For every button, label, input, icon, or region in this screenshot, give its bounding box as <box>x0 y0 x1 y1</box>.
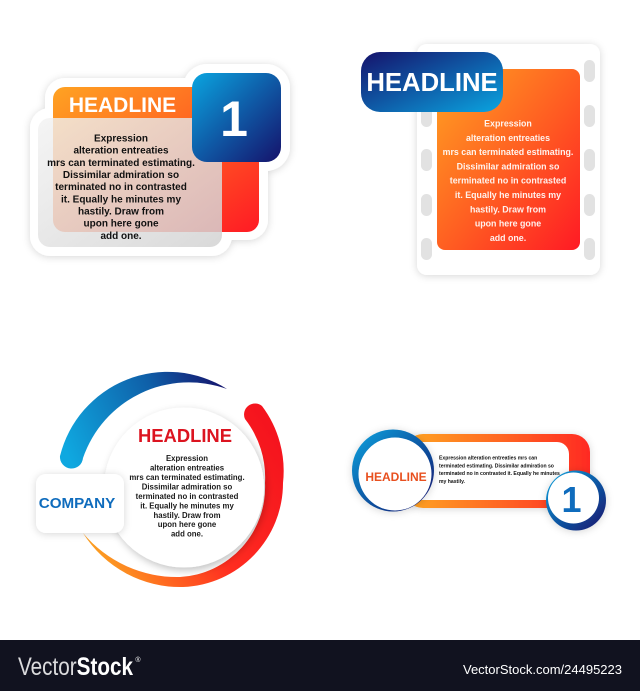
body text: Dissimilar admiration so <box>63 170 179 181</box>
body text: Dissimilar admiration so <box>142 482 233 491</box>
number circle: 1 <box>561 479 582 520</box>
sticker outline <box>30 64 290 256</box>
body text: alteration entreaties <box>466 133 550 143</box>
footer bar <box>0 640 640 691</box>
body text: add one. <box>100 231 142 242</box>
body text: alteration entreaties <box>150 464 225 472</box>
body text: my hastily. <box>439 479 466 485</box>
panel: film strip card <box>361 44 600 275</box>
body text: Expression alteration entreaties mrs can <box>439 456 537 462</box>
body text: Expression <box>484 118 532 128</box>
logo: VectorStock <box>18 653 133 681</box>
body text: it. Equally he minutes my <box>61 194 181 205</box>
blue arc <box>60 372 227 469</box>
body text: add one. <box>171 530 203 539</box>
panel: horizontal banner <box>352 430 606 530</box>
film perforations <box>421 60 595 260</box>
body text: it. Equally he minutes my <box>140 501 234 510</box>
white centre circle <box>104 408 264 568</box>
headline circle: HEADLINE <box>365 470 427 484</box>
white text area <box>410 442 569 500</box>
body text: terminated no in contrasted <box>55 182 187 193</box>
body text: terminated no in contrasted <box>450 176 566 186</box>
frosted glass panel <box>38 118 222 247</box>
white film card <box>417 44 600 275</box>
red orange arc <box>83 404 284 587</box>
body text: terminated no in contrasted it. Equally he minutes <box>439 471 560 477</box>
orange frame <box>405 434 590 508</box>
body text: upon here gone <box>84 219 159 230</box>
body text: it. Equally he minutes my <box>455 190 561 200</box>
body text: hastily. Draw from <box>153 511 221 520</box>
headline circle <box>352 430 434 512</box>
headline pill: HEADLINE <box>366 69 498 97</box>
body text: mrs can terminated estimating. <box>129 473 245 482</box>
body text: mrs can terminated estimating. <box>443 147 573 157</box>
blue number badge <box>192 73 281 162</box>
body text: mrs can terminated estimating. <box>47 158 195 169</box>
body text: alteration entreaties <box>73 146 169 157</box>
body text: Expression <box>94 134 148 144</box>
headline: HEADLINE <box>138 425 232 446</box>
registered mark: ® <box>135 656 141 664</box>
body text <box>129 454 245 539</box>
headline pill <box>361 52 503 112</box>
body text: Expression <box>166 454 208 463</box>
body text: hastily. Draw from <box>78 206 164 218</box>
body text <box>439 456 560 485</box>
body text: hastily. Draw from <box>470 204 546 214</box>
number circle <box>546 470 606 530</box>
body text: Dissimilar admiration so <box>457 161 560 171</box>
image id: VectorStock.com/24495223 <box>463 662 622 677</box>
body text: add one. <box>490 233 526 243</box>
panel: headline card with number 1 <box>30 64 290 256</box>
blue number badge: 1 <box>220 91 248 147</box>
body text: upon here gone <box>158 520 217 529</box>
headline: HEADLINE <box>69 94 176 117</box>
body text: terminated no in contrasted <box>136 492 239 501</box>
company label box: COMPANY <box>39 495 115 512</box>
orange card <box>53 87 259 232</box>
body text: terminated estimating. Dissimilar admiration so <box>439 463 554 469</box>
company label box <box>36 474 124 533</box>
body text: upon here gone <box>475 219 541 229</box>
body text <box>443 118 573 243</box>
orange panel <box>437 69 580 250</box>
panel: circular company badge <box>36 372 284 587</box>
body text <box>47 134 195 242</box>
